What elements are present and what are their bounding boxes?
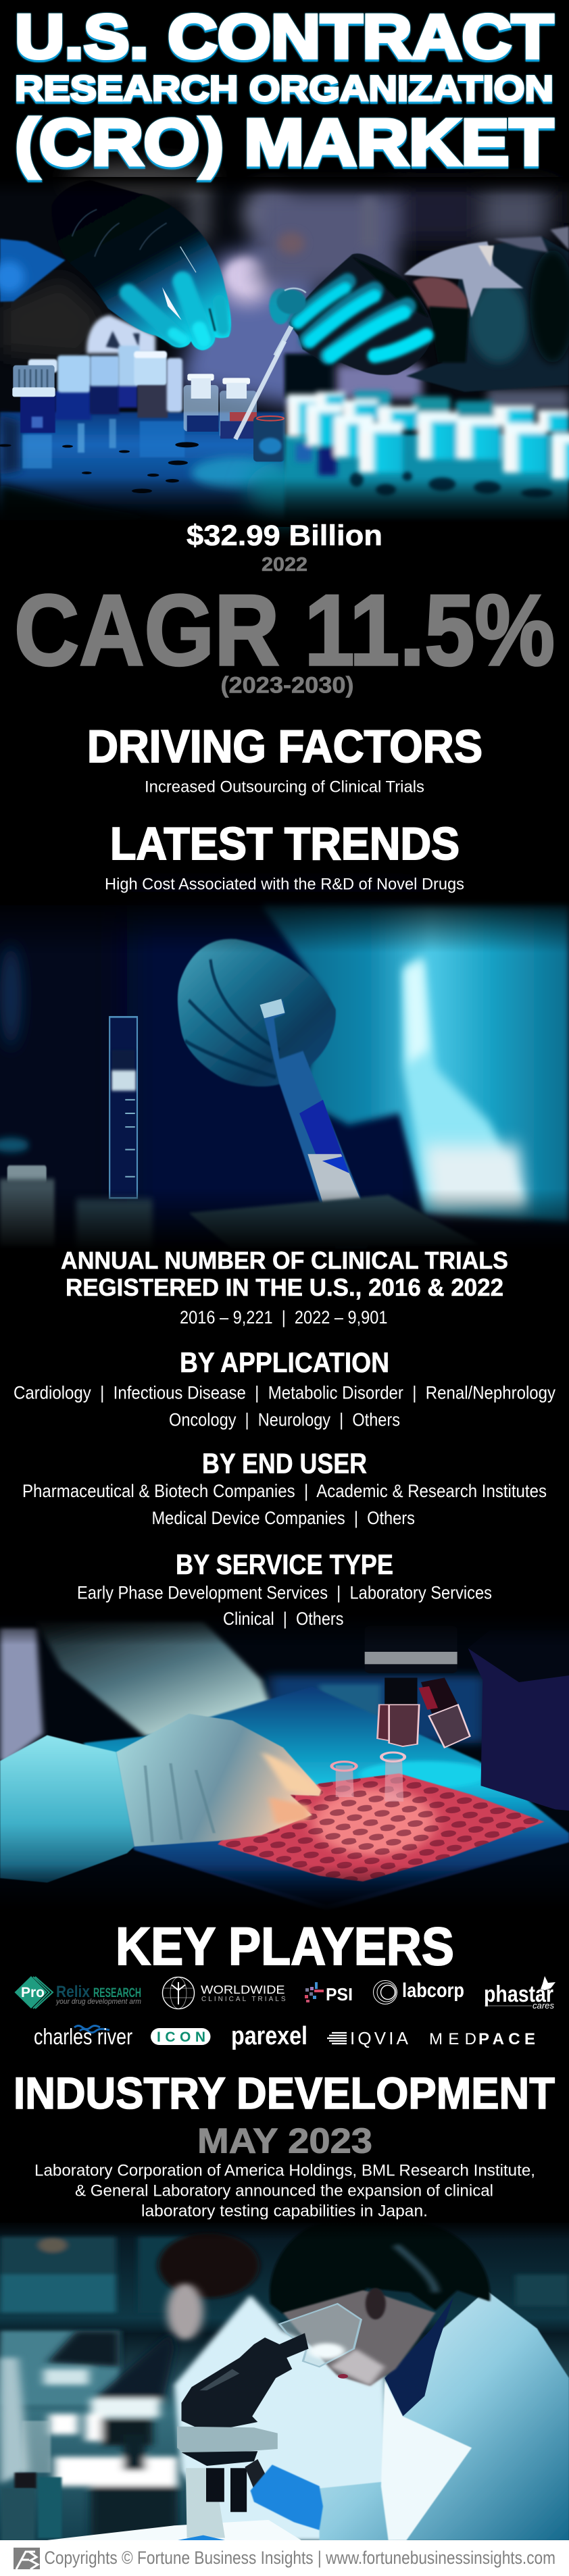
logo: phastar xyxy=(484,1976,555,2011)
sleeve cuff xyxy=(0,1735,134,1883)
logo: Pro Relix Research: your drug development arm xyxy=(55,1998,141,2006)
development text: & General Laboratory announced the expansion of clinical xyxy=(75,2182,493,2200)
market size stat: $32.99 Billion xyxy=(187,520,382,552)
glove xyxy=(116,1714,321,1846)
heading: key players: KEY PLAYERS xyxy=(116,1917,454,1976)
title xyxy=(15,3,553,179)
heading: latest trends: High Cost Associated with the R&D of Novel Drugs xyxy=(105,876,464,893)
logo: Pro Relix Research xyxy=(15,1976,141,2009)
back scientist xyxy=(158,2233,392,2540)
by service type: BY SERVICE TYPE xyxy=(176,1548,393,1580)
small vial and tray xyxy=(7,1165,47,1184)
development text: laboratory testing capabilities in Japan. xyxy=(141,2202,428,2220)
logo: Medpace xyxy=(429,2030,535,2048)
logos: key players xyxy=(15,1976,555,2050)
logo: Worldwide Clinical Trials xyxy=(162,1977,286,2009)
logo: PSI xyxy=(305,1982,353,2004)
shelves xyxy=(0,2236,569,2313)
by application: BY APPLICATION xyxy=(180,1346,389,1378)
logo: parexel: parexel xyxy=(231,2022,307,2050)
logo: ICON: ICON xyxy=(157,2029,205,2045)
back arm xyxy=(36,1621,283,1743)
development text: Laboratory Corporation of America Holdings, BML Research Institute, xyxy=(34,2162,535,2179)
logo: labcorp: labcorp xyxy=(402,1979,464,2002)
white object behind hand xyxy=(86,315,155,353)
logo: Medpace: PACE xyxy=(478,2030,535,2048)
by end user xyxy=(22,1447,547,1528)
date: May 2023: MAY 2023 xyxy=(197,2121,372,2161)
logo: Worldwide Clinical Trials: CLINICAL TRIALS xyxy=(201,1996,286,2003)
by application xyxy=(14,1346,556,1430)
icon: Fortune Business Insights logo xyxy=(14,2548,40,2569)
graduated cylinder xyxy=(109,1017,137,1198)
market size stat: 2022 xyxy=(262,554,307,576)
microscope xyxy=(177,2333,308,2538)
microscope body xyxy=(468,1630,569,1811)
title: RESEARCH ORGANIZATION xyxy=(15,69,553,109)
heading: latest trends: LATEST TRENDS xyxy=(110,818,460,869)
front scientist coat xyxy=(320,2290,569,2540)
work surface xyxy=(134,1833,569,1911)
logo: IQVIA: IQVIA xyxy=(350,2028,409,2048)
table and vial bases xyxy=(284,434,569,520)
logo: Pro Relix Research: RESEARCH xyxy=(93,1986,141,2000)
clinical trials block: 2016 – 9,221 | 2022 – 9,901 xyxy=(180,1307,388,1328)
glove xyxy=(51,180,231,350)
logo: Pro Relix Research: Relix xyxy=(56,1983,91,2001)
left vials xyxy=(12,346,182,433)
logo: Pro Relix Research: Pro xyxy=(21,1985,45,2000)
CAGR stat: (2023-2030) xyxy=(220,673,354,699)
logo: labcorp xyxy=(373,1979,464,2004)
well plate xyxy=(218,1773,545,1882)
clinical trials block: REGISTERED IN THE U.S., 2016 & 2022 xyxy=(66,1273,503,1301)
by service type: Early Phase Development Services | Laboratory Services xyxy=(77,1582,492,1602)
sleeve xyxy=(0,238,66,302)
image: gloved hand with red well plate under microscope xyxy=(0,1615,569,1912)
logo: phastar: cares xyxy=(533,2000,554,2011)
by end user: BY END USER xyxy=(202,1447,367,1480)
title: U.S. CONTRACT xyxy=(15,3,553,72)
title: (CRO) MARKET xyxy=(15,105,553,179)
pipette xyxy=(235,341,284,439)
centre vials xyxy=(184,374,284,461)
footer bar xyxy=(0,2540,569,2576)
image: hand holding test tube xyxy=(0,905,569,1258)
image left half: glove and vials xyxy=(0,164,569,520)
image: scientist at microscope xyxy=(0,2223,569,2540)
clinical trials block xyxy=(61,1246,508,1328)
pipette bulb xyxy=(269,288,292,324)
test tube xyxy=(262,1000,372,1249)
bottles xyxy=(2,2421,61,2540)
fade: scientist image top xyxy=(0,2219,569,2240)
fade: well plate image edges xyxy=(0,1611,569,1925)
logo: charles river: charles river xyxy=(34,2024,132,2049)
heading: driving factors xyxy=(87,721,483,796)
clinical trials block: ANNUAL NUMBER OF CLINICAL TRIALS xyxy=(61,1246,508,1274)
logo: PSI: PSI xyxy=(326,1984,353,2004)
right glove xyxy=(289,253,433,375)
face xyxy=(283,2290,435,2386)
hair xyxy=(270,2223,490,2314)
glass tubes xyxy=(332,1752,405,1802)
logo: Worldwide Clinical Trials: WORLDWIDE xyxy=(201,1983,285,1996)
goggles xyxy=(279,2304,361,2367)
fade: hero image top and bottom xyxy=(0,177,569,527)
by service type xyxy=(77,1548,492,1629)
heading: driving factors: Increased Outsourcing of Clinical Trials xyxy=(145,778,424,796)
market size stat xyxy=(187,520,382,576)
image: gloved hands pipetting into vials xyxy=(0,164,569,520)
logo: Medpace: MED xyxy=(429,2030,476,2048)
lab coat xyxy=(262,905,569,1222)
microscope head xyxy=(365,1626,470,1748)
fade: test tube image edges xyxy=(0,892,569,1271)
table xyxy=(0,412,284,520)
heading: driving factors: DRIVING FACTORS xyxy=(87,721,483,772)
vial caps xyxy=(287,390,569,480)
heading: latest trends xyxy=(105,818,464,893)
image right half: glove, arm and vial caps xyxy=(257,182,569,520)
by service type: Clinical | Others xyxy=(223,1609,343,1629)
arm and coat xyxy=(406,236,569,392)
blue glove xyxy=(251,2465,323,2530)
blurred microscopes xyxy=(0,2331,178,2538)
by end user: Medical Device Companies | Others xyxy=(151,1508,415,1528)
logo: phastar: phastar xyxy=(484,1981,553,2007)
gloved hand xyxy=(178,939,336,1086)
by application: Oncology | Neurology | Others xyxy=(169,1409,400,1430)
table surface xyxy=(47,2520,301,2540)
development text xyxy=(34,2162,535,2220)
